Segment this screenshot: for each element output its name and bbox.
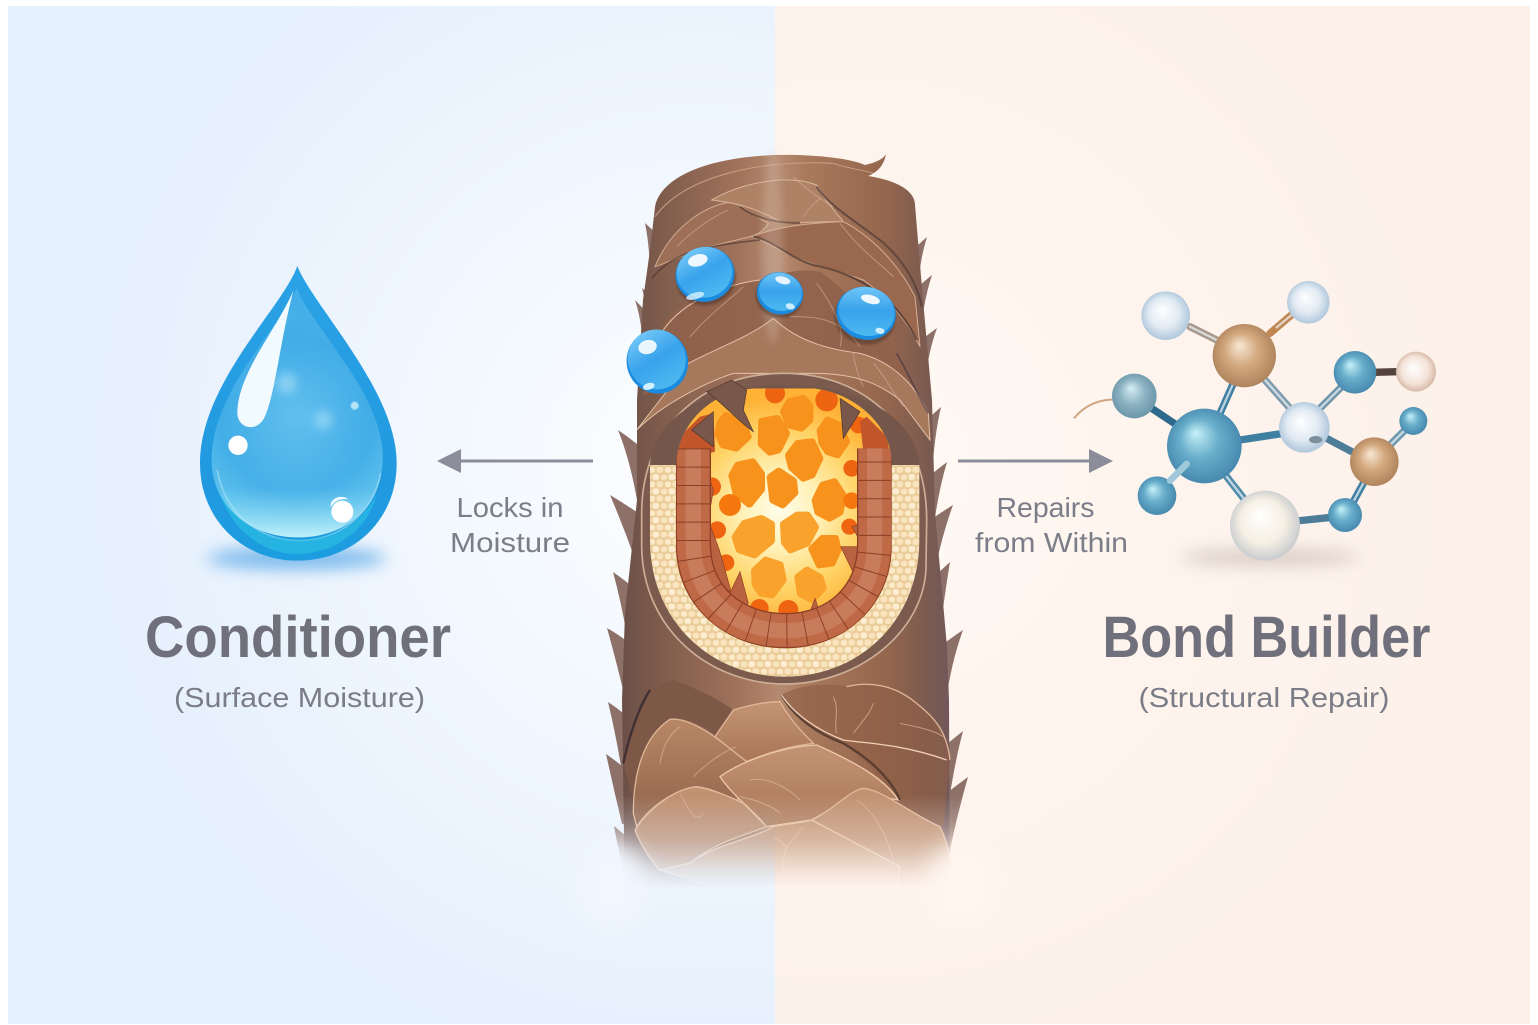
molecule wisp [1074, 399, 1113, 418]
atoms [1141, 291, 1190, 340]
lower scale layer [623, 680, 953, 913]
diagram: hair cross-section opening [642, 373, 927, 684]
illustration: hair shaft [606, 150, 968, 913]
icon: water drop [200, 266, 397, 570]
text: locks in moisture: Locks in [456, 492, 564, 523]
heading: bond builder: Bond Builder [1102, 605, 1430, 670]
drop lower sparkle [331, 497, 353, 523]
fangs [692, 380, 860, 447]
text: locks in moisture: Moisture [450, 527, 570, 558]
arrow: locks in moisture [437, 449, 593, 473]
drop inner body [212, 288, 383, 537]
drop inner edge [217, 470, 381, 541]
hair body [622, 154, 950, 905]
protein ring segments [693, 448, 875, 631]
bond stub on pale atom [1309, 436, 1322, 443]
arrow: repairs from within [958, 449, 1113, 473]
bond stub on large atom [1170, 464, 1187, 481]
medulla cells [718, 399, 846, 600]
heading: conditioner: Conditioner [145, 605, 451, 670]
molecule bonds [1152, 313, 1405, 521]
medulla edge cells [711, 388, 864, 613]
icons: moisture beads [619, 240, 902, 401]
bead 1 [669, 240, 742, 312]
drop glint [351, 402, 359, 410]
drop ground shadow [207, 547, 387, 570]
bead 4 [619, 322, 695, 401]
hair cuticle spikes [606, 223, 968, 896]
drop sparkle [228, 436, 248, 455]
glowing medulla [673, 383, 893, 650]
drop outer rim [200, 266, 397, 561]
bead 3 [828, 280, 902, 351]
drop lower glow [220, 493, 377, 554]
panel: conditioner background [8, 6, 775, 1024]
icon: molecule [1074, 281, 1436, 565]
bead 2 [751, 267, 808, 323]
inner cuticle band [650, 385, 919, 465]
upper scale layer [637, 150, 933, 440]
hair lower corner fade right [928, 843, 996, 927]
hair lower corner fade left [578, 843, 646, 927]
molecule shadow [1180, 549, 1360, 565]
panel: bond builder background [775, 6, 1530, 1024]
outer cuticle ring [642, 373, 927, 684]
protein ring tips [711, 468, 857, 610]
drop long highlight [237, 290, 294, 427]
protein ring body [693, 448, 875, 631]
drop soft glows [276, 373, 333, 429]
subheading: surface moisture: (Surface Moisture) [174, 682, 425, 713]
cream cortex layer [650, 465, 919, 677]
drop soft shade [212, 288, 383, 537]
text: repairs from within [975, 492, 1128, 558]
dark red upper corners [678, 414, 889, 453]
text: locks in moisture [450, 492, 570, 558]
protein ring base [693, 448, 875, 631]
subheading: structural repair: (Structural Repair) [1138, 682, 1390, 713]
text: repairs from within: from Within [975, 527, 1128, 558]
text: repairs from within: Repairs [996, 492, 1094, 523]
protein ring light band [693, 448, 875, 631]
